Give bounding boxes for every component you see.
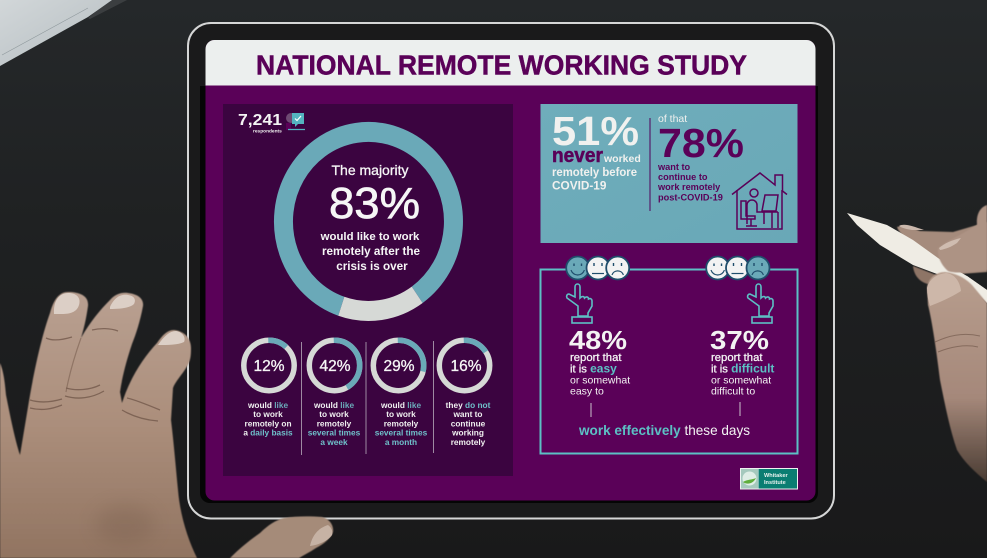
donut chart: 83 percent (283, 132, 453, 311)
stat: 78 percent: continue to (658, 172, 708, 182)
stat: 12 percent daily: would like (247, 400, 288, 410)
stat: 29 percent several times a month: a month (385, 437, 417, 447)
stat: 37 percent difficult (710, 325, 774, 398)
stat: 16 percent do not want to continue: they do not (446, 400, 491, 410)
donut label: would like to work (320, 231, 420, 243)
stat: 29 percent several times a month: remotely (384, 418, 419, 428)
respondent count (238, 112, 282, 134)
stat: 29 percent several times a month: to work (386, 409, 416, 419)
stat: 37 percent difficult: 37% (710, 325, 769, 355)
donut label: The majority (331, 162, 409, 178)
stat: 51 percent: 51% (552, 108, 639, 154)
right hand (847, 205, 987, 482)
stat: 37 percent difficult: or somewhat (711, 374, 771, 386)
stat: 12 percent daily (243, 340, 294, 438)
stat: 12 percent daily: to work (253, 409, 283, 419)
stat: 51 percent: never (552, 145, 603, 167)
laptop corner (0, 0, 127, 66)
lower fingertip behind stylus (913, 266, 936, 284)
finger separation (66, 338, 81, 392)
donut label: crisis is over (336, 260, 408, 273)
stat: 48 percent easy: report that (570, 352, 622, 364)
stat: 48 percent easy: or somewhat (570, 374, 630, 386)
logo: Whitaker Institute: Whitaker (764, 473, 788, 479)
stat: 78 percent: post-COVID-19 (658, 192, 723, 202)
stat: 42 percent several times a week: 42% (319, 358, 351, 375)
header band (206, 40, 816, 86)
stat: 16 percent do not want to continue: remotely (451, 437, 486, 447)
stat: 48 percent easy (569, 325, 630, 398)
stat: 12 percent daily: remotely on (244, 418, 292, 428)
back finger (897, 222, 987, 274)
connector ticks (591, 402, 740, 417)
stylus pen (847, 213, 987, 303)
stat: 29 percent several times a month: 29% (383, 358, 415, 375)
stat: 51 percent (552, 108, 641, 192)
stat: 51 percent: COVID-19 (552, 178, 607, 192)
stat: 42 percent several times a week: several times (308, 428, 361, 438)
knuckle creases (30, 329, 160, 421)
stat: 42 percent several times a week: to work (319, 409, 349, 419)
stat: 12 percent daily: 12% (253, 358, 285, 375)
stat: 48 percent easy: easy to (570, 386, 604, 398)
donut label: 83% (329, 179, 420, 228)
stat: 48 percent easy: it is easy (570, 362, 617, 376)
column dividers (302, 341, 434, 455)
stat: 48 percent easy: 48% (569, 325, 627, 355)
icon: pointing hand left (567, 284, 592, 323)
icon: respondent with checkbox speech bubble (286, 113, 305, 130)
stat: 78 percent (657, 113, 744, 202)
thumb (230, 516, 333, 558)
icon: person working at home (732, 173, 787, 229)
panel: majority preferences (223, 104, 513, 476)
closing line: work effectively these days (578, 422, 750, 438)
tablet screen edge (200, 86, 818, 503)
hand and fingers (0, 292, 197, 558)
stat: 42 percent several times a week: a week (320, 437, 348, 447)
hand shading (95, 505, 155, 545)
outline frame (540, 270, 798, 454)
screen background (206, 40, 816, 500)
front finger (938, 205, 987, 273)
donut label: remotely after the (322, 245, 421, 258)
logo: Whitaker Institute (740, 468, 798, 490)
stat: 16 percent do not want to continue: working (451, 428, 484, 438)
fingernail on back finger (899, 225, 924, 230)
left hand (0, 292, 333, 558)
stat: 51 percent: remotely before (552, 167, 637, 179)
panel: never worked remotely (540, 104, 798, 243)
stat: 37 percent difficult: it is difficult (711, 362, 774, 376)
stat: 51 percent: worked (603, 153, 641, 165)
front fingernail (939, 238, 961, 250)
stat: 29 percent several times a month: several times (375, 428, 428, 438)
tablet body (188, 23, 834, 518)
icon: pointing hand right (748, 284, 773, 323)
icon: three faces, sad highlighted (706, 256, 770, 280)
fingernails (54, 293, 185, 345)
stat: 42 percent several times a week: would like (313, 400, 354, 410)
stat: 16 percent do not want to continue: want to (452, 409, 483, 419)
thumbnail (927, 273, 961, 306)
stat: 29 percent several times a month: would like (380, 400, 421, 410)
stat: 78 percent: work remotely (657, 182, 721, 192)
logo: Whitaker Institute: Institute (764, 480, 786, 486)
stat: 16 percent do not want to continue (439, 340, 491, 447)
panel divider (649, 118, 651, 211)
respondent count: 7,241 (238, 112, 282, 129)
respondent count: respondents (253, 128, 282, 134)
stat: 42 percent several times a week: remotely (317, 418, 352, 428)
stat: 78 percent: 78% (658, 120, 744, 166)
panel: ease of working effectively (540, 256, 798, 454)
title: NATIONAL REMOTE WORKING STUDY (256, 50, 747, 80)
stylus end beyond thumb (967, 276, 987, 303)
knuckle creases (935, 334, 980, 352)
stat: 42 percent several times a week (308, 340, 361, 447)
stat: 78 percent: want to (657, 162, 691, 172)
icon: three faces, happy highlighted (566, 256, 629, 280)
stat: 12 percent daily: a daily basis (243, 428, 293, 438)
donut label (320, 162, 421, 273)
stat: 37 percent difficult: difficult to (711, 386, 755, 398)
stat: 16 percent do not want to continue: continue (451, 418, 486, 428)
stat: 16 percent do not want to continue: 16% (450, 358, 482, 375)
stat: 37 percent difficult: report that (711, 352, 763, 364)
stat: 29 percent several times a month (373, 340, 428, 447)
thumb and palm (927, 272, 987, 482)
stat: 78 percent: of that (658, 113, 687, 125)
tablet (188, 23, 834, 518)
